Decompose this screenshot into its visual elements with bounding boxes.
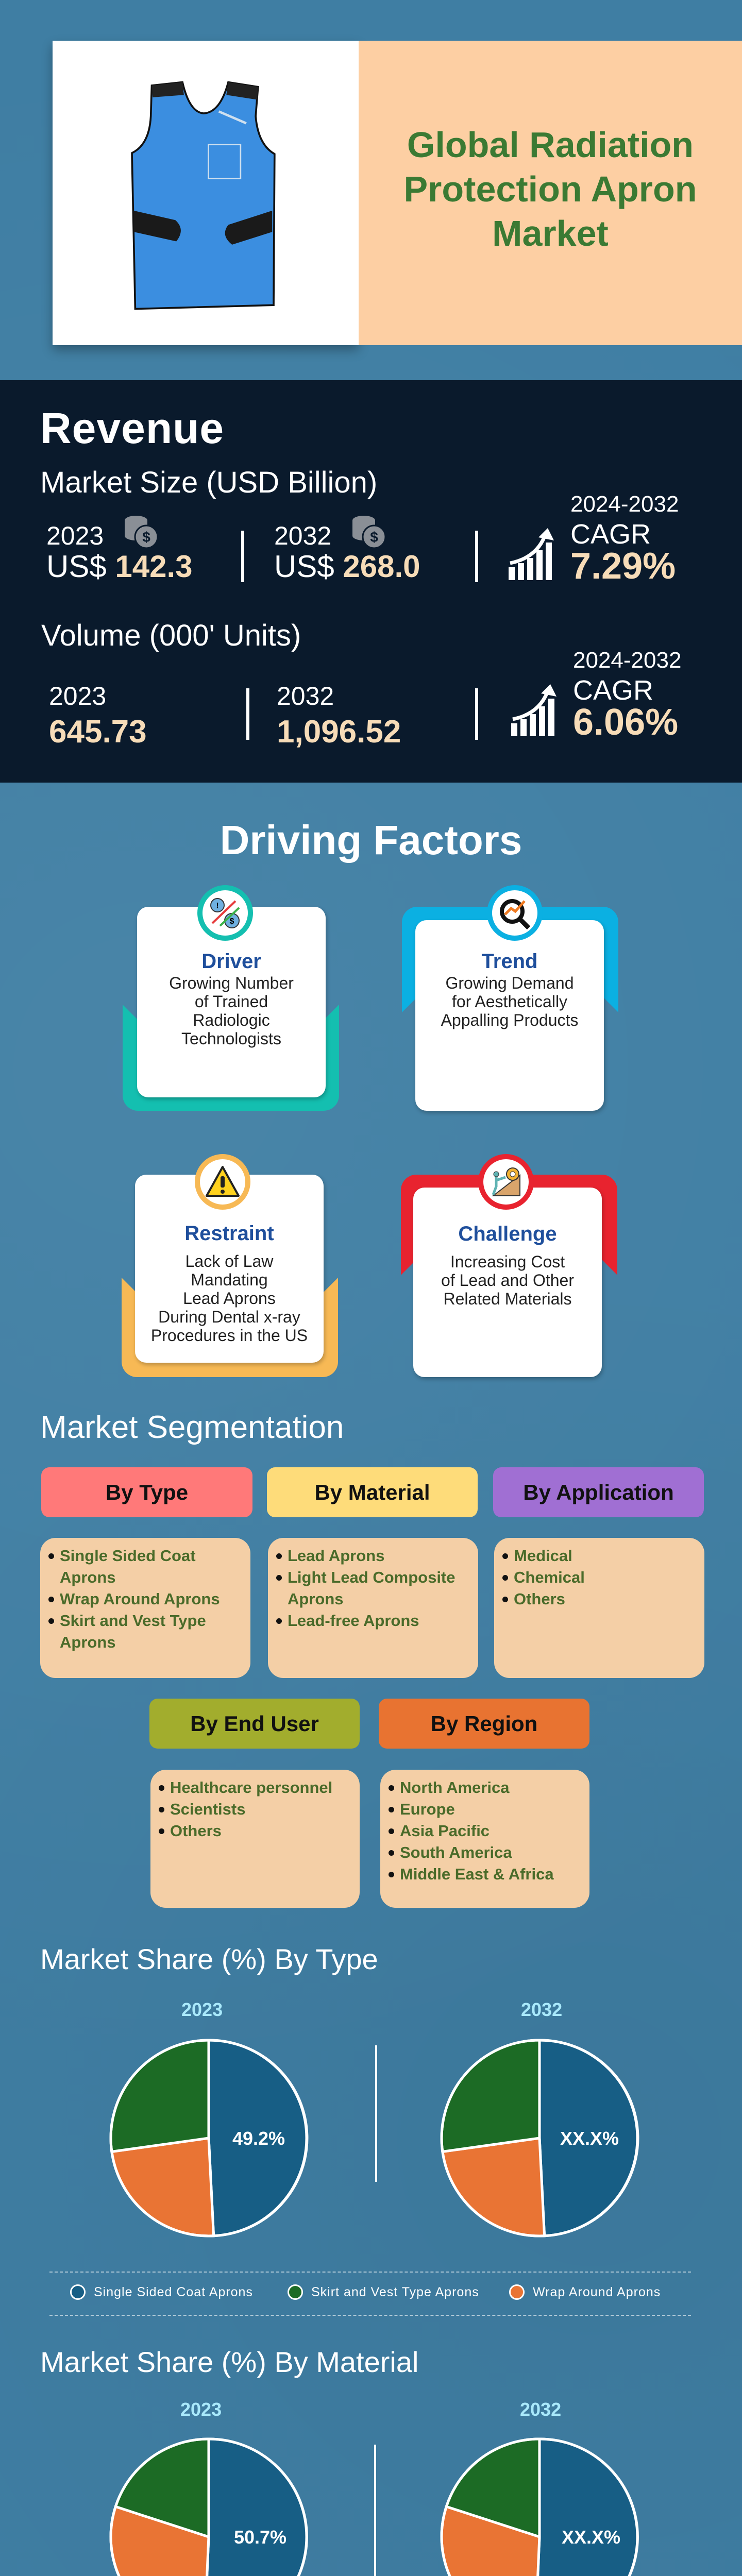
pie chart: type 2023 (109, 2039, 308, 2237)
card: driver: Technologists (181, 1029, 281, 1048)
segment header: By Material (267, 1467, 478, 1517)
header title panel: Global Radiation (407, 125, 694, 165)
card: trend: for Aesthetically (452, 992, 567, 1011)
stat: revenue CAGR (570, 492, 679, 587)
stat: volume CAGR: 2024-2032 (573, 648, 681, 673)
segment list: region: Middle East & Africa (400, 1865, 554, 1883)
stat: 2023 revenue: 2023 (46, 521, 104, 550)
card: restraint: Lack of Law (185, 1252, 273, 1270)
card: driver: Radiologic (193, 1011, 270, 1029)
icon: coins 2032 (352, 516, 384, 547)
segment list: region: North America (400, 1778, 509, 1797)
stat: volume CAGR: CAGR (573, 675, 653, 706)
label: 2023 type: 2023 (181, 1999, 223, 2020)
pie chart: type 2023: 49.2% (232, 2128, 285, 2149)
segment list: type: Wrap Around Aprons (60, 1590, 220, 1608)
legend: type (70, 2284, 661, 2300)
stat: volume CAGR (573, 648, 681, 743)
label: 2032 material: 2032 (520, 2399, 561, 2420)
pie chart: type 2032: XX.X% (560, 2128, 619, 2149)
segment header: By Region (379, 1699, 589, 1749)
segment list: region (380, 1770, 589, 1908)
legend: type: Wrap Around Aprons (533, 2284, 661, 2299)
icon: warning triangle (195, 1154, 250, 1210)
segment list: type: Single Sided Coat (60, 1547, 196, 1565)
card: restraint: Mandating (191, 1270, 268, 1289)
segment header: By End User: By End User (190, 1711, 319, 1735)
stat: 2032 volume: 1,096.52 (277, 714, 401, 750)
card: challenge: Challenge (458, 1223, 557, 1245)
segment header: By Application: By Application (523, 1480, 674, 1504)
card: challenge: Related Materials (443, 1290, 572, 1308)
segment list: application: Chemical (514, 1568, 585, 1586)
card: trend: Trend (482, 950, 537, 973)
card: driver (123, 885, 339, 1111)
card: driver: Driver (201, 950, 261, 973)
heading: market share by type: Market Share (%) By Type (40, 1943, 378, 1975)
stat: volume CAGR: 6.06% (573, 702, 678, 743)
segment list: type (40, 1538, 250, 1678)
card: restraint: Procedures in the US (151, 1326, 308, 1345)
legend: type: Single Sided Coat Aprons (94, 2284, 253, 2299)
card: challenge: of Lead and Other (441, 1271, 574, 1290)
segment list: region: Europe (400, 1800, 455, 1818)
icon: driver gears: ! (216, 902, 219, 910)
icon: trend magnifier (487, 885, 543, 941)
header image panel: apron (53, 41, 359, 345)
segment list: material: Light Lead Composite (288, 1568, 456, 1586)
heading: Revenue: Revenue (40, 404, 224, 452)
stat: 2023 volume: 645.73 (49, 714, 147, 750)
pie chart: material 2023: 50.7% (234, 2527, 286, 2548)
segment list: end user: Scientists (170, 1800, 245, 1818)
segment list: application: Others (514, 1590, 565, 1608)
stat: 2032 revenue: 2032 (274, 521, 331, 550)
card: restraint: Restraint (184, 1222, 274, 1245)
segment list: material: Lead Aprons (288, 1547, 384, 1565)
card: challenge: Increasing Cost (450, 1252, 565, 1271)
segment list: end user: Others (170, 1822, 222, 1840)
segment list: type: Aprons (60, 1568, 115, 1586)
segment list: material (268, 1538, 478, 1678)
card: restraint: Lead Aprons (183, 1289, 276, 1308)
segment list: material: Lead-free Aprons (288, 1612, 419, 1630)
icon: driver gears (197, 885, 253, 941)
stat: 2023 revenue: US$ 142.3 (46, 549, 193, 584)
heading: Driving Factors: Driving Factors (220, 817, 522, 863)
segment list: end user (150, 1770, 360, 1908)
card: trend (402, 885, 618, 1115)
header title panel (359, 41, 742, 345)
stat: revenue CAGR: 2024-2032 (570, 492, 679, 517)
card: trend: Appalling Products (441, 1011, 578, 1029)
label: 2032 type: 2032 (521, 1999, 562, 2020)
text: volume label: Volume (000' Units) (41, 619, 301, 652)
segment header: By Type: By Type (106, 1480, 188, 1504)
stat: 2032 revenue: US$ 268.0 (274, 549, 420, 584)
card: challenge (401, 1154, 617, 1381)
pie chart: material 2032 (440, 2438, 639, 2576)
segment list: application: Medical (514, 1547, 572, 1565)
segment list: material: Aprons (288, 1590, 343, 1608)
icon: growth chart volume (511, 684, 556, 736)
icon: growth chart revenue (509, 528, 554, 580)
stat: 2023 volume: 2023 (49, 682, 106, 710)
segment header: By Material: By Material (314, 1480, 430, 1504)
segment list: type: Skirt and Vest Type (60, 1612, 206, 1630)
pie chart: type 2032 (440, 2039, 639, 2237)
icon: challenge person pushing gear (478, 1154, 534, 1210)
header title panel: Protection Apron (403, 169, 697, 209)
panel: revenue (0, 380, 742, 783)
segment header: By End User (149, 1699, 360, 1749)
segment header: By Type (41, 1467, 252, 1517)
text: market size label: Market Size (USD Billion) (40, 466, 377, 499)
segment list: region: Asia Pacific (400, 1822, 490, 1840)
stat: 2032 revenue (274, 521, 420, 584)
stat: 2023 revenue (46, 521, 193, 584)
segment list: type: Aprons (60, 1633, 115, 1651)
segment header: By Region: By Region (431, 1711, 537, 1735)
stat: revenue CAGR: 7.29% (570, 546, 676, 587)
segment header: By Application (493, 1467, 704, 1517)
stat: 2032 volume: 2032 (277, 682, 334, 710)
segment list: application (494, 1538, 704, 1678)
segment list: end user: Healthcare personnel (170, 1778, 332, 1797)
card: restraint: During Dental x-ray (158, 1308, 300, 1326)
header title panel: Market (492, 213, 609, 253)
stat: 2032 volume (277, 682, 401, 750)
pie chart: material 2023 (109, 2438, 308, 2576)
stat: revenue CAGR: CAGR (570, 519, 651, 550)
icon: coins 2023 (125, 516, 157, 547)
heading: Market Segmentation: Market Segmentation (40, 1410, 344, 1445)
segment list: region: South America (400, 1843, 512, 1861)
card: trend: Growing Demand (445, 974, 574, 992)
icon: coins 2023: $ (142, 529, 150, 545)
stat: 2023 volume (49, 682, 147, 750)
card: restraint (122, 1154, 338, 1377)
card: driver: Growing Number (169, 974, 294, 992)
pie chart: material 2032: XX.X% (562, 2527, 620, 2548)
icon: coins 2032: $ (370, 529, 378, 545)
icon: driver gears: $ (230, 917, 234, 926)
label: 2023 material: 2023 (180, 2399, 222, 2420)
legend: type: Skirt and Vest Type Aprons (311, 2284, 479, 2299)
card: driver: of Trained (195, 992, 268, 1011)
icon: apron (132, 82, 275, 309)
heading: market share by material: Market Share (%) By Material (40, 2346, 418, 2378)
